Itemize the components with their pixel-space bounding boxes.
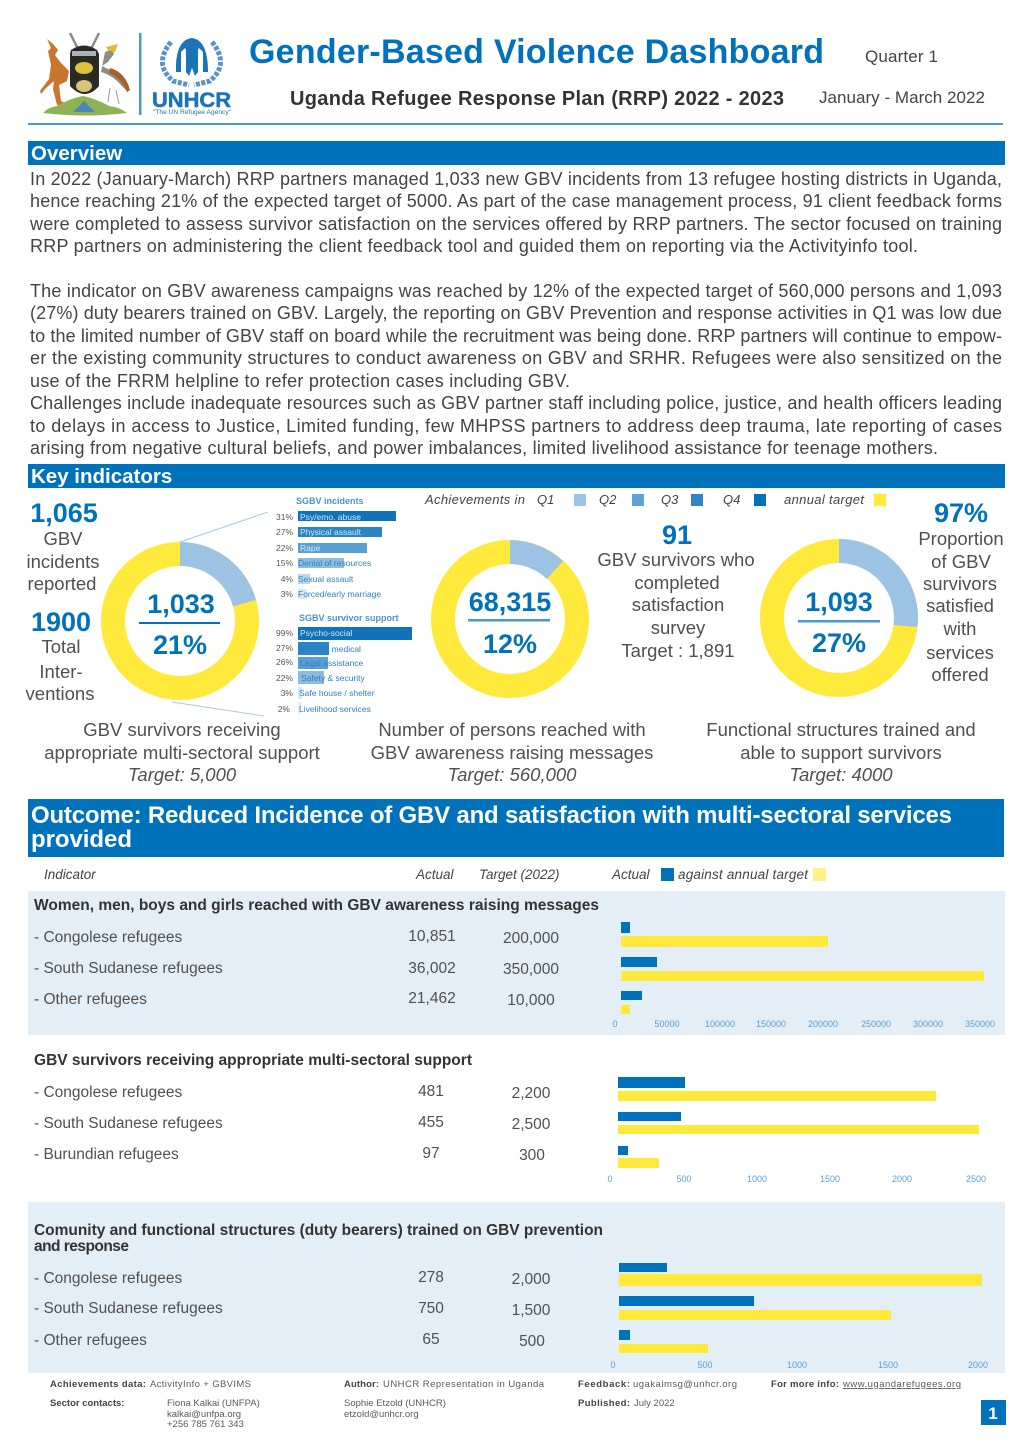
icon: UNHCR logo (152, 38, 231, 116)
outcome heading (28, 799, 1004, 857)
donut caption: persons reached: GBV awareness raising messages (371, 742, 653, 763)
panel: key indicators (26, 464, 1005, 785)
table header: Target (2022) (479, 867, 560, 882)
table rows: - Congolese refugees (34, 1084, 182, 1101)
stat: survivors completing survey: Target : 1,891 (621, 640, 735, 661)
stat: GBV incidents reported: GBV (43, 528, 83, 549)
overview heading (28, 141, 1005, 165)
bar chart: SGBV survivor support: 27% (276, 643, 293, 653)
donut caption: structures: Target: 4000 (789, 764, 893, 785)
legend: quarters: Q3 (661, 492, 679, 507)
stat: proportion satisfied: services (926, 642, 994, 663)
icon: Uganda coat of arms (40, 33, 130, 116)
page number: 1 (988, 1404, 998, 1423)
date range: January - March 2022 (819, 88, 985, 107)
table rows (34, 1083, 551, 1164)
page number (981, 1400, 1006, 1425)
donut caption: structures (706, 719, 976, 785)
donut caption: survivors (44, 719, 320, 785)
icon: UNHCR logo: "The UN Refugee Agency" (153, 110, 231, 116)
stat: total interventions: 1900 (31, 607, 91, 637)
overview text: In 2022 (January-March) RRP partners managed 1,033 new GBV incidents from 13 refugee hosting districts in Uganda, (30, 169, 1002, 189)
donut caption: persons reached: Number of persons reached with (378, 719, 646, 740)
bar chart: 200000 (808, 1019, 838, 1029)
table rows: - Other refugees (34, 991, 147, 1008)
table rows (34, 928, 559, 1009)
bar chart: SGBV survivor support: Livelihood services (299, 704, 371, 714)
footer: UNHCR Representation in Uganda (383, 1379, 545, 1390)
stat: total interventions (26, 607, 94, 704)
donut caption: survivors: Target: 5,000 (128, 764, 237, 785)
bar chart: SGBV incidents: Rape (300, 543, 321, 553)
overview text: were completed to assess survivor satisfaction on the services offered by RRP partners. The sector focused on training (29, 214, 1002, 234)
table header: Actual (611, 867, 651, 882)
stat: GBV incidents reported: incidents (26, 551, 100, 572)
bar chart: 500 (676, 1174, 692, 1184)
bar chart: SGBV incidents: SGBV incidents (296, 496, 364, 506)
table rows: 278 (418, 1269, 444, 1286)
bar chart: SGBV survivor support: 99% (276, 628, 293, 638)
stat: total interventions: Total (41, 636, 81, 657)
table rows: 21,462 (408, 990, 456, 1007)
bar chart: 0 (607, 1174, 613, 1184)
bar chart (607, 1077, 986, 1184)
table rows: 500 (519, 1333, 545, 1350)
section title (34, 1222, 603, 1255)
bar chart: 1000 (747, 1174, 767, 1184)
key indicators heading: Key indicators (31, 465, 172, 488)
bar chart: SGBV survivor support (276, 613, 412, 714)
table rows: 1,500 (512, 1302, 551, 1319)
stat: proportion satisfied: survivors (923, 573, 997, 594)
footer: Fiona Kalkai (UNFPA) (167, 1398, 260, 1409)
stat: survivors completing survey: 91 (662, 520, 692, 550)
donut caption: survivors: GBV survivors receiving (83, 719, 281, 740)
table header: Indicator (44, 867, 96, 882)
footer: Sector contacts: (50, 1398, 124, 1409)
table rows: - South Sudanese refugees (34, 1115, 223, 1132)
stat: proportion satisfied (918, 498, 1004, 685)
table rows (34, 1269, 551, 1350)
overview text: arising from negative cultural beliefs, and power imbalances, limited livelihood assistance for teenage mothers. (30, 438, 938, 458)
footer: Feedback: (578, 1379, 630, 1390)
overview text: er the existing community structures to conduct awareness on GBV and SRHR. Refugees were also sensitized on the (30, 348, 1002, 368)
donut: GBV survivors: 1,033 (147, 589, 215, 619)
stat: survivors completing survey (597, 520, 755, 661)
donut caption: persons reached: Target: 560,000 (448, 764, 577, 785)
overview text (29, 169, 1002, 458)
footer: July 2022 (634, 1398, 675, 1409)
donut caption: persons reached (371, 719, 653, 785)
stat: proportion satisfied: of GBV (931, 551, 991, 572)
bar chart: 50000 (654, 1019, 680, 1029)
footer: Published: (578, 1398, 630, 1409)
table rows: - Congolese refugees (34, 929, 182, 946)
title: Gender-Based Violence Dashboard (249, 33, 824, 71)
footer: ActivityInfo + GBVIMS (150, 1379, 251, 1390)
table header (44, 867, 826, 882)
bar chart: SGBV incidents: 15% (276, 558, 293, 568)
stat: total interventions: ventions (26, 683, 94, 704)
bar chart: SGBV survivor support: Safety & security (301, 673, 366, 683)
bar chart: SGBV incidents: Psy/emo. abuse (300, 512, 361, 522)
stat: GBV incidents reported: 1,065 (30, 498, 98, 528)
bar chart: SGBV incidents (276, 496, 396, 599)
bar chart: 1500 (878, 1360, 898, 1370)
bar chart: SGBV survivor support: 22% (276, 673, 293, 683)
bar chart: SGBV survivor support: 2% (278, 704, 290, 714)
bar chart: SGBV survivor support: SGBV survivor support (299, 613, 399, 623)
table rows: 300 (519, 1147, 545, 1164)
bar chart: 2000 (892, 1174, 912, 1184)
table rows: 2,000 (512, 1271, 551, 1288)
stat: proportion satisfied: satisfied (926, 595, 994, 616)
overview text: use of the FRRM helpline to refer protection cases including GBV. (30, 371, 570, 391)
key indicators heading (28, 464, 1005, 488)
bar chart: 2500 (966, 1174, 986, 1184)
bar chart: SGBV incidents: 27% (276, 527, 293, 537)
section title: Women, men, boys and girls reached with GBV awareness raising messages (34, 897, 599, 914)
panel: overview (28, 141, 1005, 458)
stat: total interventions: Inter- (39, 661, 83, 682)
table rows: 36,002 (408, 960, 456, 977)
donut: structures trained (772, 539, 918, 685)
overview text: to delays in access to Justice, Limited funding, few MHPSS partners to address deep trauma, late reporting of cases (30, 416, 1002, 436)
footer: +256 785 761 343 (167, 1419, 244, 1430)
bar chart: 0 (610, 1360, 616, 1370)
outcome heading: provided (31, 826, 132, 853)
table rows: 2,500 (512, 1116, 551, 1133)
bar chart: 250000 (861, 1019, 891, 1029)
bar chart: 350000 (965, 1019, 995, 1029)
donut: persons reached (443, 540, 577, 686)
bar chart: SGBV incidents: 3% (281, 589, 293, 599)
legend: quarters: Achievements in (424, 492, 525, 507)
stat: survivors completing survey: GBV survivors who (597, 549, 755, 570)
bar chart (612, 922, 995, 1029)
section title: and response (34, 1238, 129, 1255)
table rows: 65 (422, 1331, 440, 1348)
table rows: 2,200 (512, 1085, 551, 1102)
donut caption: structures: able to support survivors (740, 742, 942, 763)
table rows: 350,000 (503, 961, 559, 978)
donut caption: structures: Functional structures trained and (706, 719, 976, 740)
table rows: - Burundian refugees (34, 1146, 179, 1163)
footer (50, 1379, 961, 1430)
overview text: The indicator on GBV awareness campaigns was reached by 12% of the expected target of 560,000 persons and 1,093 (30, 281, 1002, 301)
table header: Actual (415, 867, 455, 882)
stat: proportion satisfied: Proportion (918, 528, 1004, 549)
panel: multi-sectoral support (34, 1052, 986, 1184)
bar chart: 300000 (913, 1019, 943, 1029)
table rows: 200,000 (503, 930, 559, 947)
bar chart: SGBV survivor support: Psycho-social (300, 628, 353, 638)
bar chart (610, 1263, 988, 1370)
footer: Author: (344, 1379, 379, 1390)
overview text: to the limited number of GBV staff on board while the recruitment was being done. RRP partners will continue to empow- (30, 326, 1002, 346)
outcome heading: Outcome: Reduced Incidence of GBV and satisfaction with multi-sectoral services (31, 802, 952, 829)
table rows: 455 (418, 1114, 444, 1131)
donut: GBV survivors: 21% (153, 630, 207, 660)
legend: quarters: annual target (784, 492, 865, 507)
table rows: - South Sudanese refugees (34, 960, 223, 977)
overview text: hence reaching 21% of the expected target of 5000. As part of the case management process, 91 client feedback forms (30, 191, 1002, 211)
table rows: - South Sudanese refugees (34, 1300, 223, 1317)
bar chart: 500 (697, 1360, 713, 1370)
bar chart: 2000 (968, 1360, 988, 1370)
table rows: 750 (418, 1300, 444, 1317)
callout lines (172, 512, 268, 716)
overview text: RRP partners on administering the client feedback tool and guided them on reporting via the Activityinfo tool. (30, 236, 918, 256)
subtitle: Uganda Refugee Response Plan (RRP) 2022 - 2023 (290, 88, 784, 110)
footer: Sophie Etzold (UNHCR) (344, 1398, 446, 1409)
bar chart: SGBV survivor support: Legal assistance (300, 658, 364, 668)
donut: structures trained: 1,093 (805, 587, 873, 617)
bar chart: 0 (612, 1019, 618, 1029)
bar chart: SGBV incidents: Sexual assault (298, 574, 354, 584)
footer: For more info: (771, 1379, 839, 1390)
logo divider (139, 33, 142, 115)
bar chart: 1000 (787, 1360, 807, 1370)
icon: UNHCR logo: UNHCR (152, 89, 231, 112)
stat: proportion satisfied: with (943, 618, 976, 639)
table rows: - Congolese refugees (34, 1270, 182, 1287)
footer: kalkai@unfpa.org (167, 1409, 241, 1420)
table rows: 10,000 (507, 992, 555, 1009)
overview text: (27%) duty bearers trained on GBV. Largely, the reporting on GBV Prevention and response activities in Q1 was low due (30, 303, 1002, 323)
section title: Comunity and functional structures (duty bearers) trained on GBV prevention (34, 1222, 603, 1239)
legend: quarters (424, 492, 886, 507)
overview heading: Overview (31, 142, 122, 165)
stat: GBV incidents reported: reported (28, 573, 96, 594)
section title: GBV survivors receiving appropriate multi-sectoral support (34, 1052, 472, 1069)
bar chart: 150000 (756, 1019, 786, 1029)
stat: survivors completing survey: survey (651, 617, 706, 638)
footer: etzold@unhcr.org (344, 1409, 419, 1420)
donut: persons reached: 12% (483, 629, 537, 659)
bar chart: SGBV incidents: Denial of resources (298, 558, 371, 568)
footer: ugakaimsg@unhcr.org (633, 1379, 737, 1390)
bar chart: SGBV survivor support: 3% (281, 688, 293, 698)
bar chart: SGBV incidents: Physical assault (300, 527, 362, 537)
legend: quarters: Q2 (599, 492, 617, 507)
table rows: 97 (422, 1145, 440, 1162)
footer: Achievements data: (50, 1379, 146, 1390)
bar chart: SGBV incidents: 4% (281, 574, 293, 584)
quarter label: Quarter 1 (865, 47, 938, 66)
donut: GBV survivors (113, 542, 256, 688)
stat: proportion satisfied: offered (931, 664, 989, 685)
bar chart: SGBV survivor support: Safe house / shelter (299, 688, 375, 698)
table header: against annual target (678, 867, 809, 882)
donut caption: survivors: appropriate multi-sectoral support (44, 742, 320, 763)
overview text: Challenges include inadequate resources such as GBV partner staff including police, justice, and health officers leading (30, 393, 1002, 413)
bar chart: SGBV survivor support: 26% (276, 657, 293, 667)
table rows: 10,851 (408, 928, 456, 945)
donut: structures trained: 27% (812, 628, 866, 658)
legend: quarters: Q4 (723, 492, 740, 507)
header rule (28, 123, 1003, 125)
stat: GBV incidents reported (26, 498, 100, 594)
donut: persons reached: 68,315 (469, 587, 551, 617)
panel: awareness raising (28, 891, 1005, 1035)
legend: quarters: Q1 (537, 492, 554, 507)
footer: www.ugandarefugees.org (842, 1379, 961, 1390)
table rows: 481 (418, 1083, 444, 1100)
table rows: - Other refugees (34, 1332, 147, 1349)
stat: survivors completing survey: satisfaction (632, 594, 724, 615)
bar chart: SGBV incidents: Forced/early marriage (298, 589, 381, 599)
bar chart: SGBV survivor support: Health / medical (300, 644, 361, 654)
panel: duty bearers trained (28, 1202, 1005, 1373)
stat: survivors completing survey: completed (634, 572, 720, 593)
bar chart: 100000 (705, 1019, 735, 1029)
bar chart: SGBV incidents: 22% (276, 543, 293, 553)
bar chart: 1500 (820, 1174, 840, 1184)
stat: proportion satisfied: 97% (934, 498, 988, 528)
bar chart: SGBV incidents: 31% (276, 512, 293, 522)
